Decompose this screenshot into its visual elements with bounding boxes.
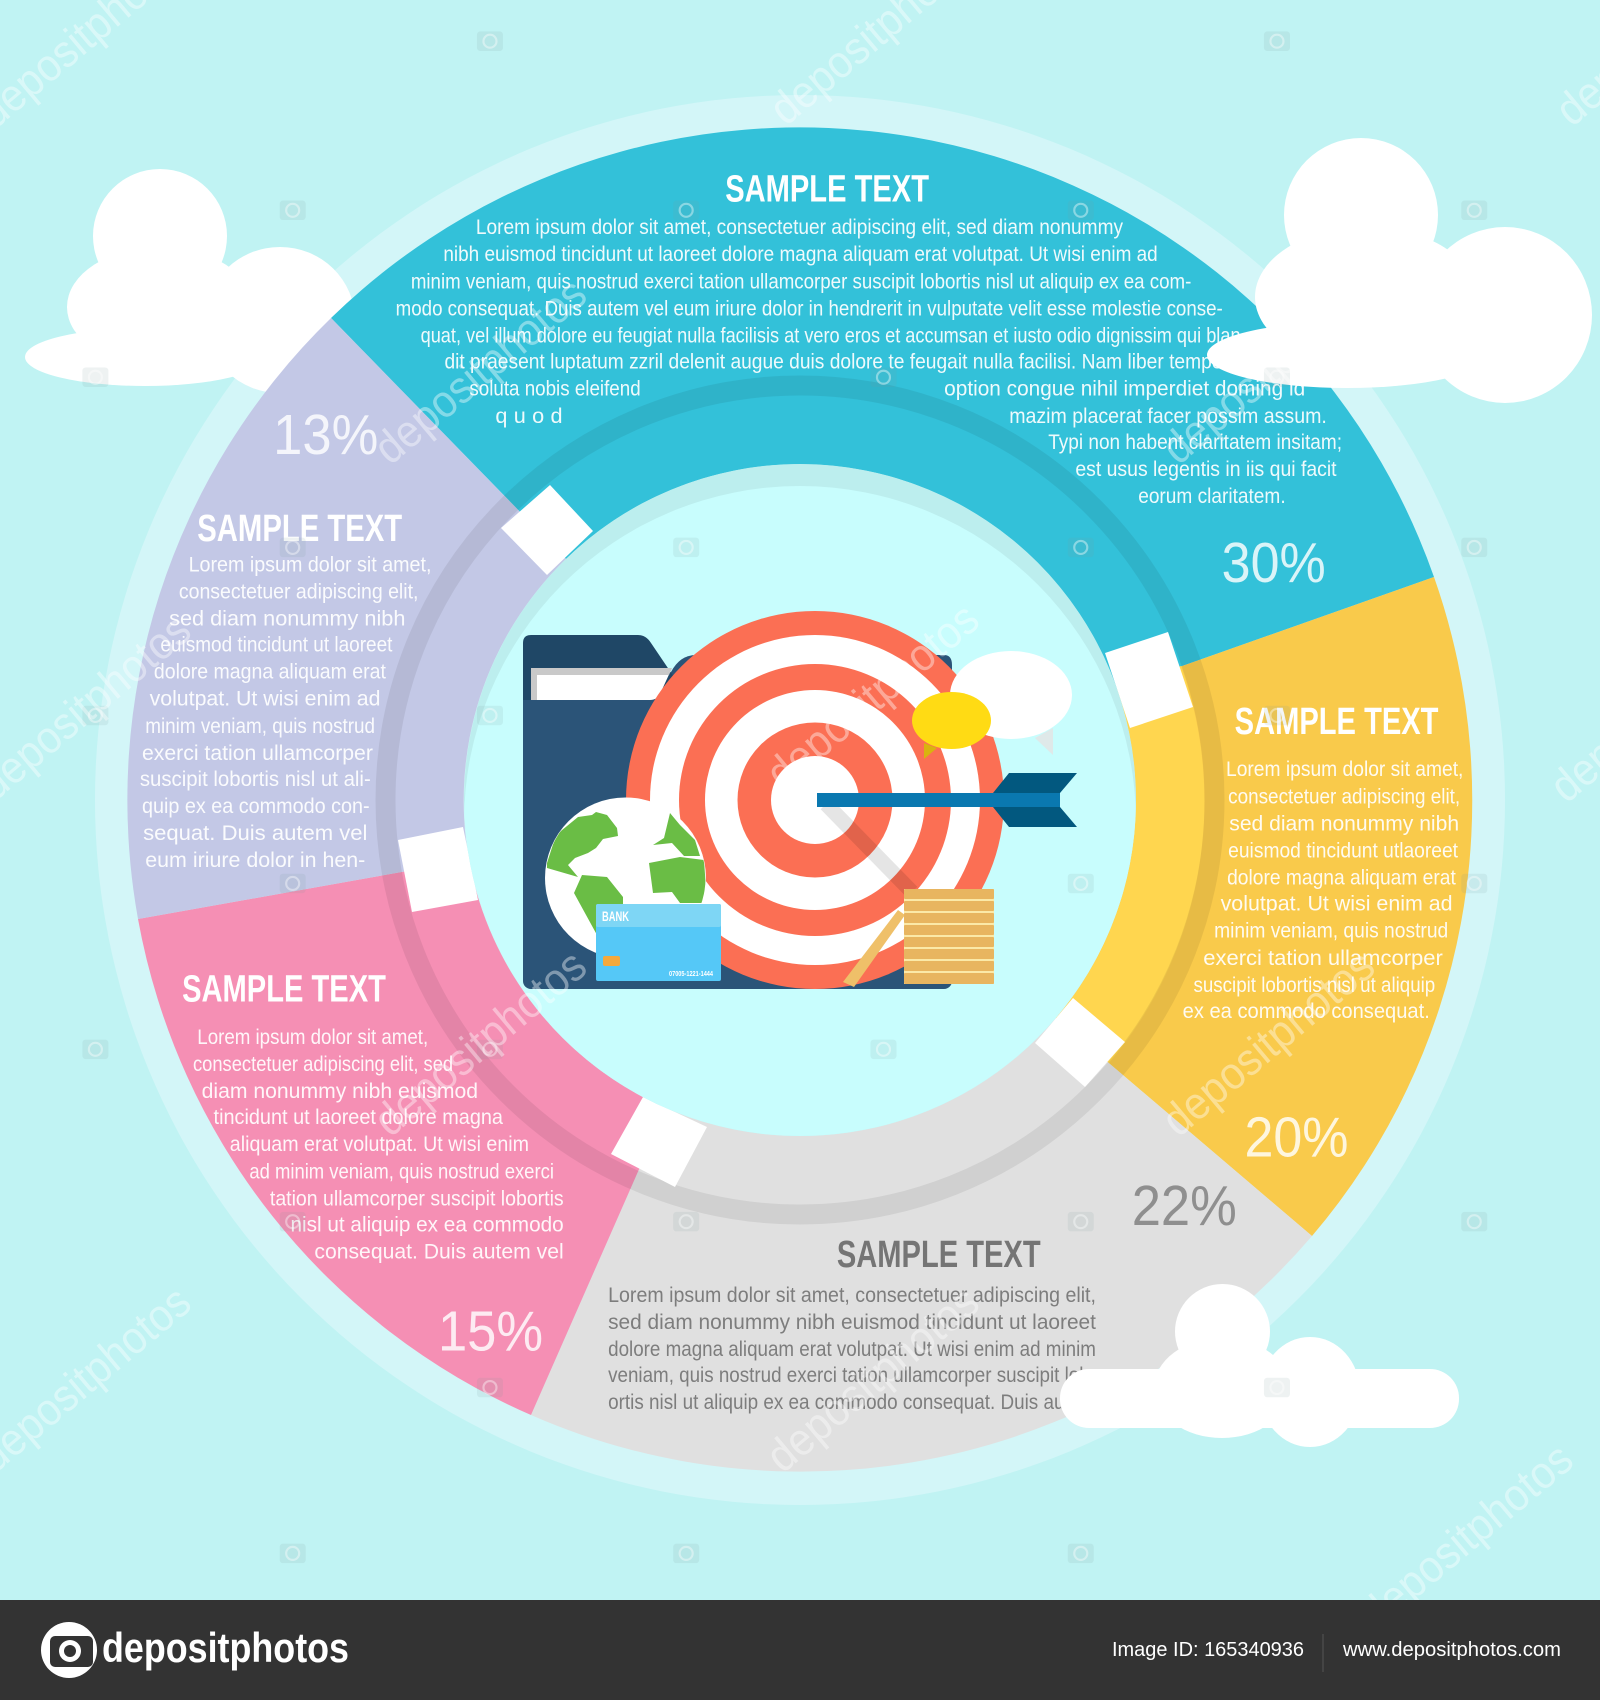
lavender body: Lorem ipsum dolor sit amet, [189, 551, 431, 576]
icon: speech bubbles [912, 651, 1072, 759]
grey body: dolore magna aliquam erat volutpat. Ut wisi enim ad minim [608, 1336, 1096, 1361]
pink body: aliquam erat volutpat. Ut wisi enim [230, 1131, 529, 1156]
grey body: Lorem ipsum dolor sit amet, consectetuer adipiscing elit, [608, 1282, 1096, 1307]
clouds in front [1060, 138, 1592, 1447]
segment: blue 30% [331, 127, 1434, 689]
watermark text: depositphotos [1152, 267, 1384, 474]
cloud: bottom right [1060, 1284, 1459, 1447]
pink body [193, 1024, 564, 1264]
blue panel body: nibh euismod tincidunt ut laoreet dolore magna aliquam erat volutpat. Ut wisi enim ad [443, 241, 1158, 266]
yellow inner lighter band [1056, 666, 1204, 1063]
grey body [608, 1282, 1096, 1414]
segment: grey 22% [531, 1018, 1312, 1472]
pink percentage: 15% [438, 1300, 543, 1363]
blue panel body: est usus legentis in iis qui facit [1075, 456, 1337, 481]
text layer [140, 169, 1463, 1414]
yellow body: suscipit lobortis nisl ut aliquip [1193, 972, 1435, 997]
watermark text: depositphotos [364, 267, 596, 474]
watermark text: depositphotos [364, 940, 596, 1146]
lavender body: sed diam nonummy nibh [169, 605, 405, 630]
yellow body: euismod tincidunt utlaoreet [1228, 837, 1458, 862]
cloud: top left [25, 169, 355, 393]
footer bar [0, 1600, 1600, 1700]
icon: bank card: BANK [602, 908, 629, 924]
yellow body: consectetuer adipiscing elit, [1228, 783, 1460, 808]
watermark text: depositphotos [756, 593, 988, 799]
blue panel body: dit praesent luptatum zzril delenit augue duis dolore te feugait nulla facilisi. Nam liber tempor cum [444, 349, 1270, 374]
yellow body: dolore magna aliquam erat [1227, 865, 1456, 890]
grey percentage: 22% [1132, 1174, 1237, 1237]
lavender body: dolore magna aliquam erat [154, 659, 386, 684]
yellow body: volutpat. Ut wisi enim ad [1221, 891, 1453, 916]
logo wordmark: depositphotos [102, 1624, 349, 1671]
blue panel body: quat, vel illum dolore eu feugiat nulla facilisis at vero eros et accumsan et iusto odio dignissim qui blan- [421, 323, 1247, 348]
watermark text: depositphotos [1350, 1433, 1582, 1639]
lavender body [140, 551, 431, 872]
pink body: tincidunt ut laoreet dolore magna [214, 1104, 504, 1129]
grey body: ortis nisl ut aliquip ex ea commodo consequat. Duis autem [608, 1389, 1096, 1414]
blue panel heading: SAMPLE TEXT [725, 169, 929, 211]
icon: bank card: 07005-1221-1444 [669, 971, 713, 978]
grey body: veniam, quis nostrud exerci tation ullamcorper suscipit lob- [608, 1362, 1096, 1387]
pink body: Lorem ipsum dolor sit amet, [197, 1024, 428, 1049]
icon: globe [545, 798, 707, 958]
lavender body: euismod tincidunt ut laoreet [160, 631, 392, 656]
blue panel body: q u o d [495, 403, 563, 428]
yellow body: Lorem ipsum dolor sit amet, [1226, 756, 1463, 781]
blue panel body: minim veniam, quis nostrud exerci tation ullamcorper suscipit lobortis nisl ut aliquip ex ea com- [411, 268, 1191, 293]
blue percentage: 30% [1222, 531, 1326, 594]
image id: Image ID: 165340936 [1112, 1639, 1304, 1661]
pink body: nisl ut aliquip ex ea commodo [291, 1211, 564, 1236]
icon: bank card [596, 904, 721, 981]
donut chart [127, 127, 1472, 1472]
icon: target [626, 611, 1004, 989]
dark inner band [386, 386, 1214, 1214]
segment: pink 15% [138, 860, 666, 1415]
yellow body: exerci tation ullamcorper [1203, 945, 1443, 970]
outer pale ring [95, 95, 1505, 1505]
pink body: ad minim veniam, quis nostrud exerci [249, 1158, 554, 1183]
blue panel body: Typi non habent claritatem insitam; [1048, 429, 1342, 454]
icon: arrow [817, 773, 1077, 827]
pink body: consectetuer adipiscing elit, sed [193, 1051, 453, 1076]
icon: coin stack and stick [843, 889, 994, 987]
white separator blocks [398, 485, 1193, 1187]
center disk with crescent ring [464, 464, 1136, 1158]
lavender body: exerci tation ullamcorper [142, 740, 373, 765]
cloud: top right [1207, 138, 1592, 403]
blue panel body: mazim placerat facer possim assum. [1009, 403, 1327, 428]
center illustration [523, 611, 1077, 989]
yellow body: sed diam nonummy nibh [1229, 810, 1459, 835]
grey heading: SAMPLE TEXT [837, 1234, 1041, 1276]
yellow body [1183, 756, 1463, 1023]
yellow body: ex ea commodo consequat. [1183, 998, 1430, 1023]
blue panel body: soluta nobis eleifend [469, 376, 641, 401]
blue panel body [396, 214, 1342, 508]
icon: folder [523, 635, 952, 989]
pink body: consequat. Duis autem vel [314, 1239, 564, 1264]
lavender body: consectetuer adipiscing elit, [179, 578, 418, 603]
yellow body: minim veniam, quis nostrud [1214, 918, 1448, 943]
yellow percentage: 20% [1244, 1106, 1349, 1169]
segment: lavender 13% [127, 318, 566, 919]
lavender body: suscipit lobortis nisl ut ali- [140, 766, 371, 791]
icon: logo camera [41, 1622, 97, 1678]
blue panel body: eorum claritatem. [1138, 483, 1286, 508]
website url: www.depositphotos.com [1342, 1639, 1561, 1661]
yellow heading: SAMPLE TEXT [1235, 701, 1438, 743]
lavender percentage: 13% [273, 403, 378, 466]
watermark text: depositphotos [1152, 940, 1384, 1146]
pink heading: SAMPLE TEXT [182, 969, 386, 1011]
grey body: sed diam nonummy nibh euismod tincidunt ut laoreet [608, 1309, 1096, 1334]
segment: yellow 20% [1056, 577, 1472, 1236]
lavender heading: SAMPLE TEXT [197, 508, 402, 550]
pink body: tation ullamcorper suscipit lobortis [270, 1185, 564, 1210]
lavender body: minim veniam, quis nostrud [145, 713, 375, 738]
watermark text: depositphotos [756, 1276, 988, 1482]
watermark cameras [82, 31, 1487, 1563]
lavender body: eum iriure dolor in hen- [145, 847, 365, 872]
lavender body: quip ex ea commodo con- [142, 793, 370, 818]
blue panel body: modo consequat. Duis autem vel eum iriure dolor in hendrerit in vulputate velit esse molestie conse- [396, 295, 1223, 320]
pink body: diam nonummy nibh euismod [202, 1078, 478, 1103]
blue panel body: Lorem ipsum dolor sit amet, consectetuer adipiscing elit, sed diam nonummy [476, 214, 1123, 239]
blue panel body: option congue nihil imperdiet doming id [944, 376, 1305, 401]
lavender body: volutpat. Ut wisi enim ad [150, 686, 380, 711]
lavender body: sequat. Duis autem vel [143, 820, 367, 845]
